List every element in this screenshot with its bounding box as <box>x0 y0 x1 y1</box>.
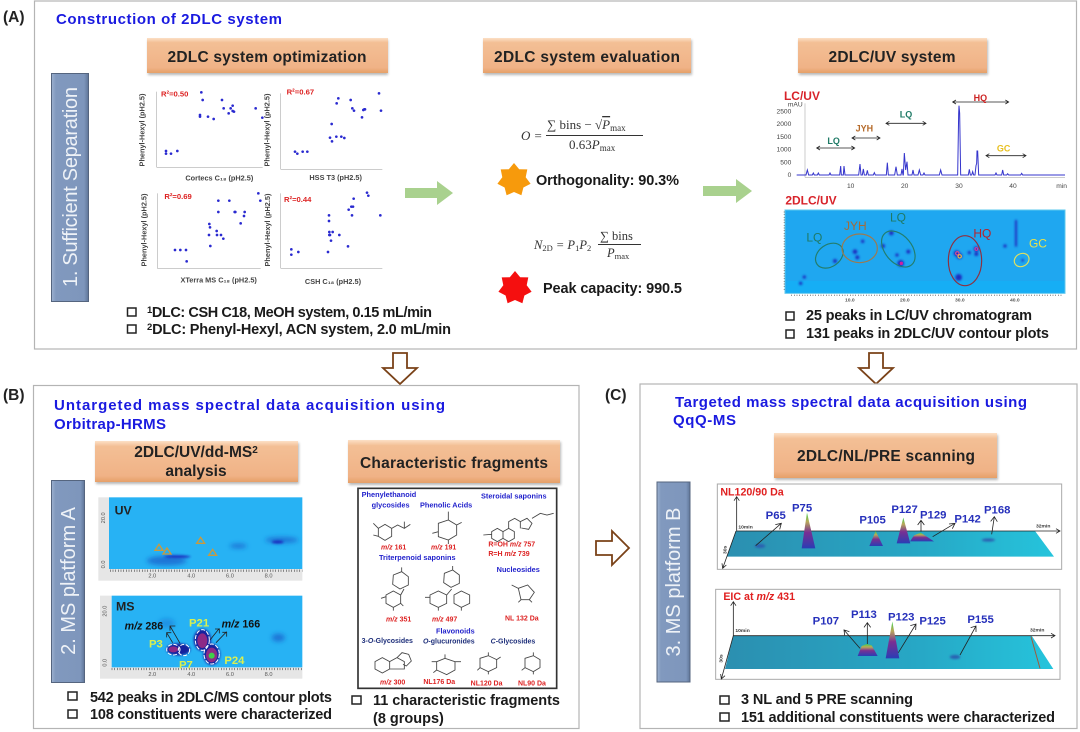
contour plot: 2DLC/UV: 10.0 <box>845 297 855 303</box>
formula: orthogonality <box>521 117 643 153</box>
group: steroidal saponins <box>481 492 554 558</box>
text block: scanning results: 3 NL and 5 PRE scanning <box>741 692 913 708</box>
contour plot: MS: P21 <box>189 618 209 630</box>
range: HQ: HQ <box>974 93 987 103</box>
header: 2DLC/UV system: 2DLC/UV system <box>828 49 956 66</box>
3D plot: EIC at m/z 431: 10min <box>735 628 750 634</box>
group: flavonoids: NL176 Da <box>423 679 455 686</box>
3D plot: NL120/90 Da: P142 <box>954 514 981 526</box>
3D plot: EIC at m/z 431: P155 <box>967 614 994 626</box>
arrow: A to B <box>383 353 417 384</box>
scatter plot: HSS T3: HSS T3 (pH2.5) <box>309 173 362 182</box>
formula: peak capacity: P <box>578 238 587 252</box>
contour plot: MS: P3 <box>149 639 163 651</box>
heading: construction of 2DLC system: Construction of 2DLC system <box>56 11 282 28</box>
group: flavonoids: m/z 300 <box>380 679 405 686</box>
chromatogram: LC/UV: min <box>1056 183 1067 190</box>
contour plot: UV: 8.0 <box>265 573 273 579</box>
scatter plot: XTerra MS C18 <box>140 192 262 284</box>
contour plot: UV <box>98 497 302 581</box>
text block: scanning results <box>720 692 1055 726</box>
contour plot: MS: m/z 166 <box>222 618 260 630</box>
3D plot: EIC at m/z 431: P113 <box>851 609 877 621</box>
side bar: MS platform A: 2. MS platform A <box>58 506 80 655</box>
contour plot: MS: P24 <box>224 655 245 667</box>
scatter plot: Cortecs C18: R²=0.50 <box>161 90 188 99</box>
text block: fragments <box>352 693 560 727</box>
chromatogram: LC/UV: 2000 <box>777 121 792 128</box>
contour plot: 2DLC/UV: JYH <box>844 219 867 233</box>
header: dd-MS2 analysis: 2 <box>252 445 258 456</box>
group: flavonoids: 3-O-Glycosides <box>362 638 413 645</box>
arrow: optimization to evaluation <box>405 181 453 205</box>
scatter plot: HSS T3: Phenyl-Hexyl (pH2.5) <box>262 93 271 166</box>
contour plot: MS: 20.0 <box>103 606 109 617</box>
3D plot: EIC at m/z 431: P125 <box>919 615 946 627</box>
contour plot: MS: 0.0 <box>103 659 109 667</box>
chromatogram: LC/UV: mAU <box>788 102 803 109</box>
group: steroidal saponins: Steroidal saponins <box>481 492 547 501</box>
contour plot: MS: 2.0 <box>148 672 156 678</box>
group: phenylethanoid glycosides: m/z 161 <box>381 545 406 552</box>
group: triterpenoid saponins: m/z 351 <box>386 616 411 623</box>
header: characteristic fragments <box>348 440 561 485</box>
scatter plot: XTerra MS C18: Phenyl-Hexyl (pH2.5) <box>140 193 149 266</box>
header: 2DLC system optimization: 2DLC system optimization <box>168 49 366 66</box>
3D plot: NL120/90 Da: P65 <box>766 510 786 522</box>
contour plot: 2DLC/UV: LQ <box>890 210 906 224</box>
3D plot: NL120/90 Da: 10min <box>738 525 753 531</box>
group: phenolic acids: Phenolic Acids <box>420 501 472 510</box>
formula: peak capacity: N <box>534 238 542 252</box>
group: triterpenoid saponins: m/z 497 <box>432 616 457 623</box>
3D plot: EIC at m/z 431: P107 <box>813 616 839 628</box>
scatter plot: Cortecs C18: Phenyl-Hexyl (pH2.5) <box>138 93 147 166</box>
3D plot: NL120/90 Da: P168 <box>984 505 1010 517</box>
range: JYH <box>852 123 880 140</box>
3D plot: NL120/90 Da: P129 <box>920 510 946 522</box>
contour plot: 2DLC/UV: 20.0 <box>900 297 910 303</box>
group: flavonoids: NL90 Da <box>518 681 546 688</box>
formula: peak capacity: P <box>606 246 615 260</box>
text: orthogonality value: Orthogonality: 90.3% <box>536 173 679 189</box>
text block: MS results: 542 peaks in 2DLC/MS contour plots <box>90 690 332 706</box>
contour plot: UV: 4.0 <box>187 573 195 579</box>
group: phenylethanoid glycosides <box>362 490 416 552</box>
range: GC: GC <box>997 143 1011 153</box>
range: LQ second: LQ <box>900 109 912 119</box>
3D plot: NL120/90 Da: 32min <box>1036 524 1050 530</box>
group: flavonoids: O-glucuronides <box>423 639 475 646</box>
3D plot: NL120/90 Da: P105 <box>859 514 886 526</box>
3D plot: EIC at m/z 431: 32min <box>1030 627 1044 633</box>
chromatogram: LC/UV: 2500 <box>777 108 792 115</box>
chromatogram: LC/UV: 500 <box>780 159 792 166</box>
contour plot: MS <box>100 596 302 679</box>
group: nucleosides: Nucleosides <box>497 565 540 574</box>
text block: fragments: 11 characteristic fragments <box>373 693 560 709</box>
text block: 2DLC conditions: 1 <box>147 305 153 316</box>
chromatogram: LC/UV: LC/UV <box>784 89 820 103</box>
scatter plot: Cortecs C18 <box>138 90 264 183</box>
3D plot: NL120/90 Da: P75 <box>792 503 812 515</box>
group: steroidal saponins: R=H m/z 739 <box>488 551 530 558</box>
group: triterpenoid saponins <box>379 553 470 623</box>
panel: construction of 2DLC system <box>34 1 1076 349</box>
text block: 2DLC conditions: DLC: CSH C18, MeOH system, 0.15 mL/min <box>152 305 432 321</box>
formula: orthogonality: max <box>600 143 616 153</box>
3D plot: EIC at m/z 431: EIC at m/z 431 <box>723 591 795 603</box>
scatter plot: CSH C18: R²=0.44 <box>284 195 312 204</box>
heading: targeted acquisition: Targeted mass spectral data acquisition using <box>675 394 1027 411</box>
text block: peak counts: 25 peaks in LC/UV chromatogram <box>806 308 1032 324</box>
contour plot: MS: 6.0 <box>226 672 234 678</box>
scatter plot: CSH C18 <box>263 191 382 286</box>
text block: 2DLC conditions: DLC: Phenyl-Hexyl, ACN system, 2.0 mL/min <box>152 322 451 338</box>
range: LQ <box>817 136 855 150</box>
range: LQ second <box>886 109 926 125</box>
group: nucleosides: NL 132 Da <box>505 616 539 623</box>
text block: MS results <box>68 690 332 723</box>
chromatogram: LC/UV: 1500 <box>777 134 792 141</box>
3D plot: NL120/90 Da: P127 <box>891 504 918 516</box>
range: HQ <box>953 93 1009 104</box>
side bar: sufficient separation <box>52 74 88 302</box>
chromatogram: LC/UV: 40 <box>1009 183 1017 190</box>
formula: peak capacity <box>533 229 641 261</box>
heading: untargeted acquisition <box>54 397 445 433</box>
scatter plot: HSS T3 <box>262 87 382 182</box>
group: phenolic acids: m/z 191 <box>431 545 456 552</box>
chromatogram: LC/UV: 0 <box>788 172 792 179</box>
header: characteristic fragments: Characteristic fragments <box>360 455 548 472</box>
arrow: evaluation to 2DLC/UV <box>703 179 752 203</box>
chromatogram: LC/UV <box>777 89 1067 190</box>
header: 2DLC system optimization <box>147 38 388 75</box>
group: nucleosides <box>497 565 540 623</box>
heading: untargeted acquisition: Orbitrap-HRMS <box>54 416 166 433</box>
contour plot: 2DLC/UV: HQ <box>973 226 991 240</box>
arrow: A to C <box>859 353 893 384</box>
formula: orthogonality: max <box>610 123 626 133</box>
group: triterpenoid saponins: Triterpenoid saponins <box>379 553 456 562</box>
3D plot: EIC at m/z 431: P123 <box>888 612 914 624</box>
3D plot: NL120/90 Da <box>717 484 1062 569</box>
text block: peak counts: 131 peaks in 2DLC/UV contour plots <box>806 326 1049 342</box>
formula: peak capacity: 2D <box>542 243 553 253</box>
text block: scanning results: 151 additional constituents were characterized <box>741 710 1055 726</box>
text block: fragments: (8 groups) <box>373 711 444 727</box>
scatter plot: HSS T3: R²=0.67 <box>287 87 314 96</box>
range: JYH: JYH <box>856 123 873 133</box>
formula: peak capacity: 2 <box>587 243 591 253</box>
label: section A: (A) <box>3 9 25 26</box>
header: dd-MS2 analysis: 2DLC/UV/dd-MS <box>134 444 252 461</box>
formula: peak capacity: = P <box>553 238 575 252</box>
side bar: MS platform B: 3. MS platform B <box>663 508 685 656</box>
3D plot: NL120/90 Da: NL120/90 Da <box>720 486 784 498</box>
label: section B: (B) <box>3 387 25 404</box>
contour plot: 2DLC/UV: 2DLC/UV <box>785 194 837 208</box>
label: section C: (C) <box>605 387 627 404</box>
3D plot: EIC at m/z 431 <box>716 589 1060 679</box>
text block: 2DLC conditions: 2 <box>147 322 152 333</box>
group: flavonoids: Flavonoids <box>436 626 475 635</box>
side bar: MS platform A <box>52 480 84 682</box>
chromatogram: LC/UV: 20 <box>901 183 909 190</box>
formula: orthogonality: 0.63P <box>569 137 600 152</box>
icon: orange star <box>497 163 531 195</box>
contour plot: UV: UV <box>115 503 133 517</box>
group: flavonoids <box>362 626 546 688</box>
side bar: MS platform B <box>657 482 690 682</box>
formula: orthogonality: O = <box>521 128 542 143</box>
chromatogram: LC/UV: 1000 <box>777 147 792 154</box>
scatter plot: Cortecs C18: Cortecs C₁₈ (pH2.5) <box>185 174 254 183</box>
scatter plot: XTerra MS C18: R²=0.69 <box>164 192 192 201</box>
panel: MS platform B <box>640 384 1077 728</box>
3D plot: NL120/90 Da: 30s <box>723 545 729 554</box>
3D plot: EIC at m/z 431: 30s <box>719 654 725 663</box>
scatter plot: CSH C18: Phenyl-Hexyl (pH2.5) <box>263 193 272 266</box>
arrow: B to C <box>596 531 629 565</box>
group: flavonoids: C-Glycosides <box>491 639 535 646</box>
group: phenolic acids <box>420 501 472 552</box>
chromatogram: LC/UV: 30 <box>955 183 963 190</box>
group: phenylethanoid glycosides: Phenylethanoid <box>362 490 416 499</box>
header: 2DLC/NL/PRE scanning <box>774 433 998 480</box>
contour plot: 2DLC/UV: 40.0 <box>1010 297 1020 303</box>
contour plot: MS: P7 <box>179 659 193 671</box>
scatter plot: CSH C18: CSH C₁₈ (pH2.5) <box>305 277 362 286</box>
heading: targeted acquisition: QqQ-MS <box>673 412 736 429</box>
group: steroidal saponins: R=OH m/z 757 <box>488 541 535 548</box>
contour plot: 2DLC/UV <box>784 194 1065 303</box>
contour plot: MS: 8.0 <box>265 672 273 678</box>
header: 2DLC system evaluation: 2DLC system evaluation <box>494 49 680 66</box>
contour plot: 2DLC/UV: GC <box>1029 236 1047 250</box>
header: dd-MS2 analysis <box>95 441 299 484</box>
range: GC <box>986 143 1026 158</box>
contour plot: MS: MS <box>116 600 134 614</box>
group: phenylethanoid glycosides: glycosides <box>372 501 410 510</box>
icon: red star <box>498 271 532 303</box>
contour plot: UV: 2.0 <box>148 573 156 579</box>
formula: peak capacity: max <box>615 251 630 261</box>
panel: MS platform A <box>34 386 579 728</box>
group: flavonoids: NL120 Da <box>471 681 503 688</box>
contour plot: UV: 6.0 <box>226 573 234 579</box>
contour plot: MS: m/z 286 <box>125 620 163 632</box>
contour plot: UV: 0.0 <box>101 560 107 568</box>
heading: untargeted acquisition: Untargeted mass spectral data acquisition using <box>54 397 445 414</box>
heading: targeted acquisition <box>673 394 1027 429</box>
text block: MS results: 108 constituents were characterized <box>90 707 332 723</box>
scatter plot: XTerra MS C18: XTerra MS C₁₈ (pH2.5) <box>180 275 257 284</box>
formula: orthogonality: ∑ bins − √P <box>547 117 610 132</box>
text block: peak counts <box>786 308 1049 342</box>
range: LQ: LQ <box>827 136 840 146</box>
text block: 2DLC conditions <box>128 305 451 338</box>
scatter plots: orthogonality <box>138 87 382 286</box>
header: 2DLC/UV system <box>798 38 988 75</box>
formula: peak capacity: 1 <box>575 243 579 253</box>
chromatogram: LC/UV: 10 <box>847 183 855 190</box>
contour plot: 2DLC/UV: 30.0 <box>955 297 965 303</box>
contour plot: 2DLC/UV: LQ <box>806 230 822 244</box>
contour plot: UV: 20.0 <box>101 512 107 523</box>
header: dd-MS2 analysis: analysis <box>165 463 227 480</box>
diagram: characteristic fragments <box>358 488 557 688</box>
formula: peak capacity: ∑ bins <box>600 229 633 243</box>
contour plot: MS: 4.0 <box>187 672 195 678</box>
header: 2DLC/NL/PRE scanning: 2DLC/NL/PRE scanning <box>797 448 975 465</box>
text: peak capacity value: Peak capacity: 990.5 <box>543 281 682 297</box>
side bar: sufficient separation: 1. Sufficient Separation <box>60 87 82 287</box>
header: 2DLC system evaluation <box>483 38 692 75</box>
